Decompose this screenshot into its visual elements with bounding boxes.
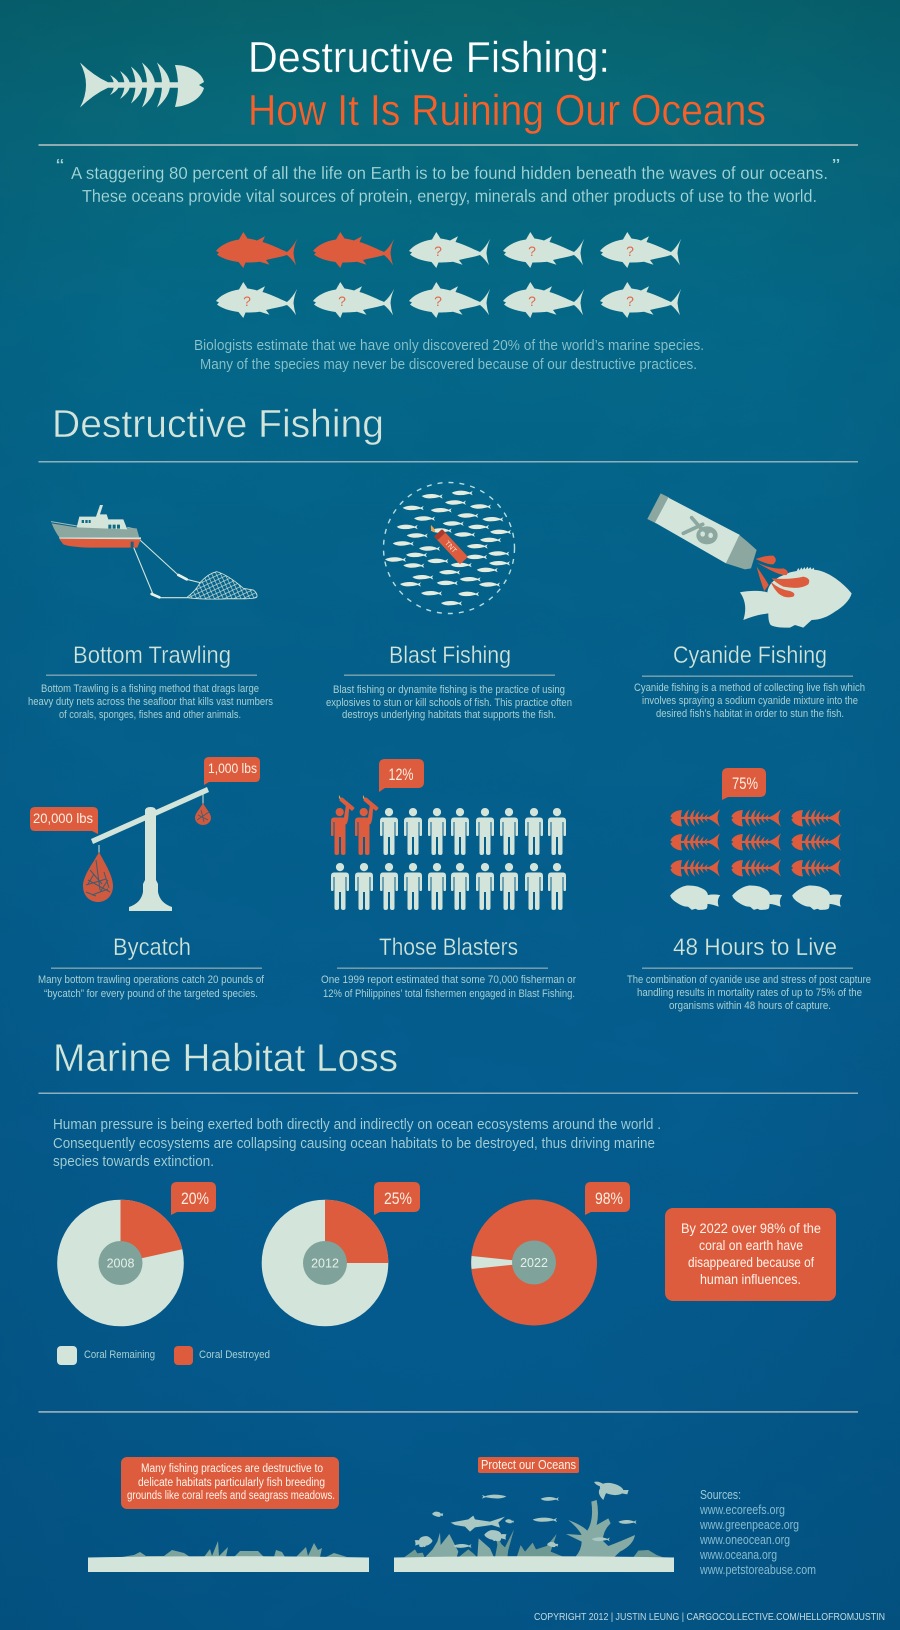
pictogram: discovered species fish: ? (626, 293, 634, 309)
pictogram: discovered species fish: ? (338, 293, 346, 309)
intro quote: These oceans provide vital sources of protein, energy, minerals and other products of use to the world. (82, 186, 817, 206)
callout: by 2022: By 2022 over 98% of the (681, 1220, 821, 1236)
description: Many bottom trawling operations catch 20 pounds of (38, 974, 264, 986)
callout: 75% (722, 768, 766, 800)
heading: Cyanide Fishing (673, 642, 827, 669)
heading: Those Blasters (379, 934, 518, 961)
species caption (194, 338, 704, 373)
chart: 2008 pie: 2008 (107, 1256, 134, 1270)
description (326, 684, 572, 721)
panel: bycatch (30, 757, 264, 1000)
callout: 98%: 98% (595, 1189, 623, 1208)
intro quote: A staggering 80 percent of all the life on Earth is to be found hidden beneath the waves of our oceans. (71, 163, 828, 183)
title: How It Is Ruining Our Oceans (248, 86, 766, 135)
callout: 25% (374, 1182, 420, 1215)
title: Destructive Fishing: (248, 33, 610, 82)
description: desired fish’s habitat in order to stun the fish. (656, 708, 844, 720)
callout: 20,000 lbs: 20,000 lbs (33, 810, 93, 826)
intro paragraph: Human pressure is being exerted both directly and indirectly on ocean ecosystems around the world . (53, 1116, 661, 1133)
heading: Bottom Trawling (73, 642, 231, 669)
description: involves spraying a sodium cyanide mixture into the (642, 695, 858, 707)
panel: bottom trawling (28, 505, 273, 721)
pictogram: discovered species fish (216, 232, 681, 318)
sources: www.oneocean.org (699, 1533, 790, 1547)
intro paragraph: species towards extinction. (53, 1153, 214, 1170)
icon: trawler and net (51, 505, 257, 599)
pictogram: discovered species fish: ? (434, 243, 442, 259)
legend: Coral Remaining (84, 1349, 155, 1361)
description (627, 974, 871, 1012)
callout: by 2022: coral on earth have (699, 1237, 803, 1253)
pictogram: discovered species fish: ? (434, 293, 442, 309)
heading: destructive fishing: Destructive Fishing (52, 403, 384, 446)
description (634, 682, 865, 720)
heading: Blast Fishing (389, 642, 511, 669)
pictogram: skeletons and live fish (670, 809, 842, 910)
callout: fishing practices: delicate habitats particularly fish breeding (138, 1477, 325, 1489)
chart: 2012 pie: 2012 (311, 1256, 339, 1270)
description: handling results in mortality rates of up to 75% of the (637, 987, 862, 999)
title (248, 33, 766, 135)
panel: those blasters (321, 759, 576, 1000)
callout: 1,000 lbs (204, 757, 260, 785)
panel: blast fishing (326, 482, 572, 721)
description: Bottom Trawling is a fishing method that drags large (41, 683, 259, 695)
callout: by 2022: human influences. (700, 1271, 801, 1287)
icon: balance scale with nets (83, 787, 211, 911)
description (28, 683, 273, 721)
panel: cyanide fishing (634, 493, 865, 720)
panel: 48 hours to live (627, 768, 871, 1012)
description: The combination of cyanide use and stress of post capture (627, 974, 871, 986)
description: “bycatch” for every pound of the targeted species. (44, 988, 258, 1000)
description: explosives to stun or kill schools of fish. This practice often (326, 697, 572, 709)
callout: 20%: 20% (181, 1189, 209, 1208)
description (321, 974, 576, 1000)
description: 12% of Philippines’ total fishermen engaged in Blast Fishing. (323, 988, 575, 1000)
intro paragraph: Consequently ecosystems are collapsing causing ocean habitats to be destroyed, thus driving marine (53, 1135, 655, 1152)
sources: www.ecoreefs.org (699, 1503, 785, 1517)
icon: school of fish with TNT (384, 482, 514, 614)
callout: 12% (379, 759, 424, 792)
callout: 20,000 lbs (30, 807, 98, 834)
callout: fishing practices (121, 1457, 339, 1509)
sources: www.oceana.org (699, 1548, 777, 1562)
description: destroys underlying habitats that supports the fish. (342, 709, 556, 721)
label: protect our oceans: Protect our Oceans (481, 1458, 576, 1472)
description: heavy duty nets across the seafloor that kills vast numbers (28, 696, 273, 708)
sources: www.petstoreabuse.com (699, 1563, 816, 1577)
chart: 2022 pie (471, 1182, 630, 1326)
description: Blast fishing or dynamite fishing is the practice of using (333, 684, 565, 696)
sources (699, 1488, 816, 1577)
callout: 20% (171, 1182, 216, 1215)
sources: Sources: (700, 1488, 741, 1502)
icon: fish skeleton logo (80, 62, 204, 108)
pictogram: discovered species fish: ? (528, 243, 536, 259)
callout: by 2022 (665, 1208, 836, 1301)
pictogram: discovered species fish: ? (243, 293, 251, 309)
legend: Coral Destroyed (199, 1349, 270, 1361)
intro quote (56, 156, 840, 206)
intro paragraph (53, 1116, 661, 1170)
intro quote: ” (832, 156, 840, 176)
chart: 2008 pie (57, 1182, 216, 1326)
intro quote: “ (56, 156, 64, 176)
description (38, 974, 264, 1000)
callout: 75%: 75% (732, 775, 758, 793)
description: Cyanide fishing is a method of collecting live fish which (634, 682, 865, 694)
pictogram: discovered species fish: ? (528, 293, 536, 309)
heading: marine habitat loss: Marine Habitat Loss (53, 1037, 398, 1080)
chart: 2012 pie (262, 1182, 420, 1326)
pictogram: people (331, 795, 566, 910)
callout: by 2022: disappeared because of (688, 1254, 814, 1270)
illustration: damaged seafloor (88, 1541, 369, 1572)
heading: 48 Hours to Live (673, 934, 837, 961)
heading: Bycatch (113, 934, 191, 961)
species caption: Biologists estimate that we have only discovered 20% of the world’s marine species. (194, 338, 704, 354)
description: of corals, sponges, fishes and other animals. (59, 709, 241, 721)
icon: school of fish with TNT: TNT (443, 540, 458, 555)
callout: 98% (585, 1182, 630, 1215)
legend (57, 1346, 270, 1365)
callout: 12%: 12% (388, 766, 414, 784)
description: organisms within 48 hours of capture. (669, 1000, 831, 1012)
sources: www.greenpeace.org (699, 1518, 799, 1532)
description: One 1999 report estimated that some 70,000 fisherman or (321, 974, 576, 986)
callout: fishing practices: Many fishing practices are destructive to (141, 1463, 323, 1475)
chart: 2022 pie: 2022 (520, 1256, 548, 1270)
illustration: healthy reef (394, 1481, 674, 1572)
callout: fishing practices: grounds like coral reefs and seagrass meadows. (127, 1490, 335, 1502)
icon: poison tube and fish (647, 493, 852, 628)
pictogram: discovered species fish: ? (626, 243, 634, 259)
species caption: Many of the species may never be discovered because of our destructive practices. (200, 357, 697, 373)
callout: 1,000 lbs: 1,000 lbs (208, 760, 257, 776)
callout: 25%: 25% (384, 1189, 412, 1208)
